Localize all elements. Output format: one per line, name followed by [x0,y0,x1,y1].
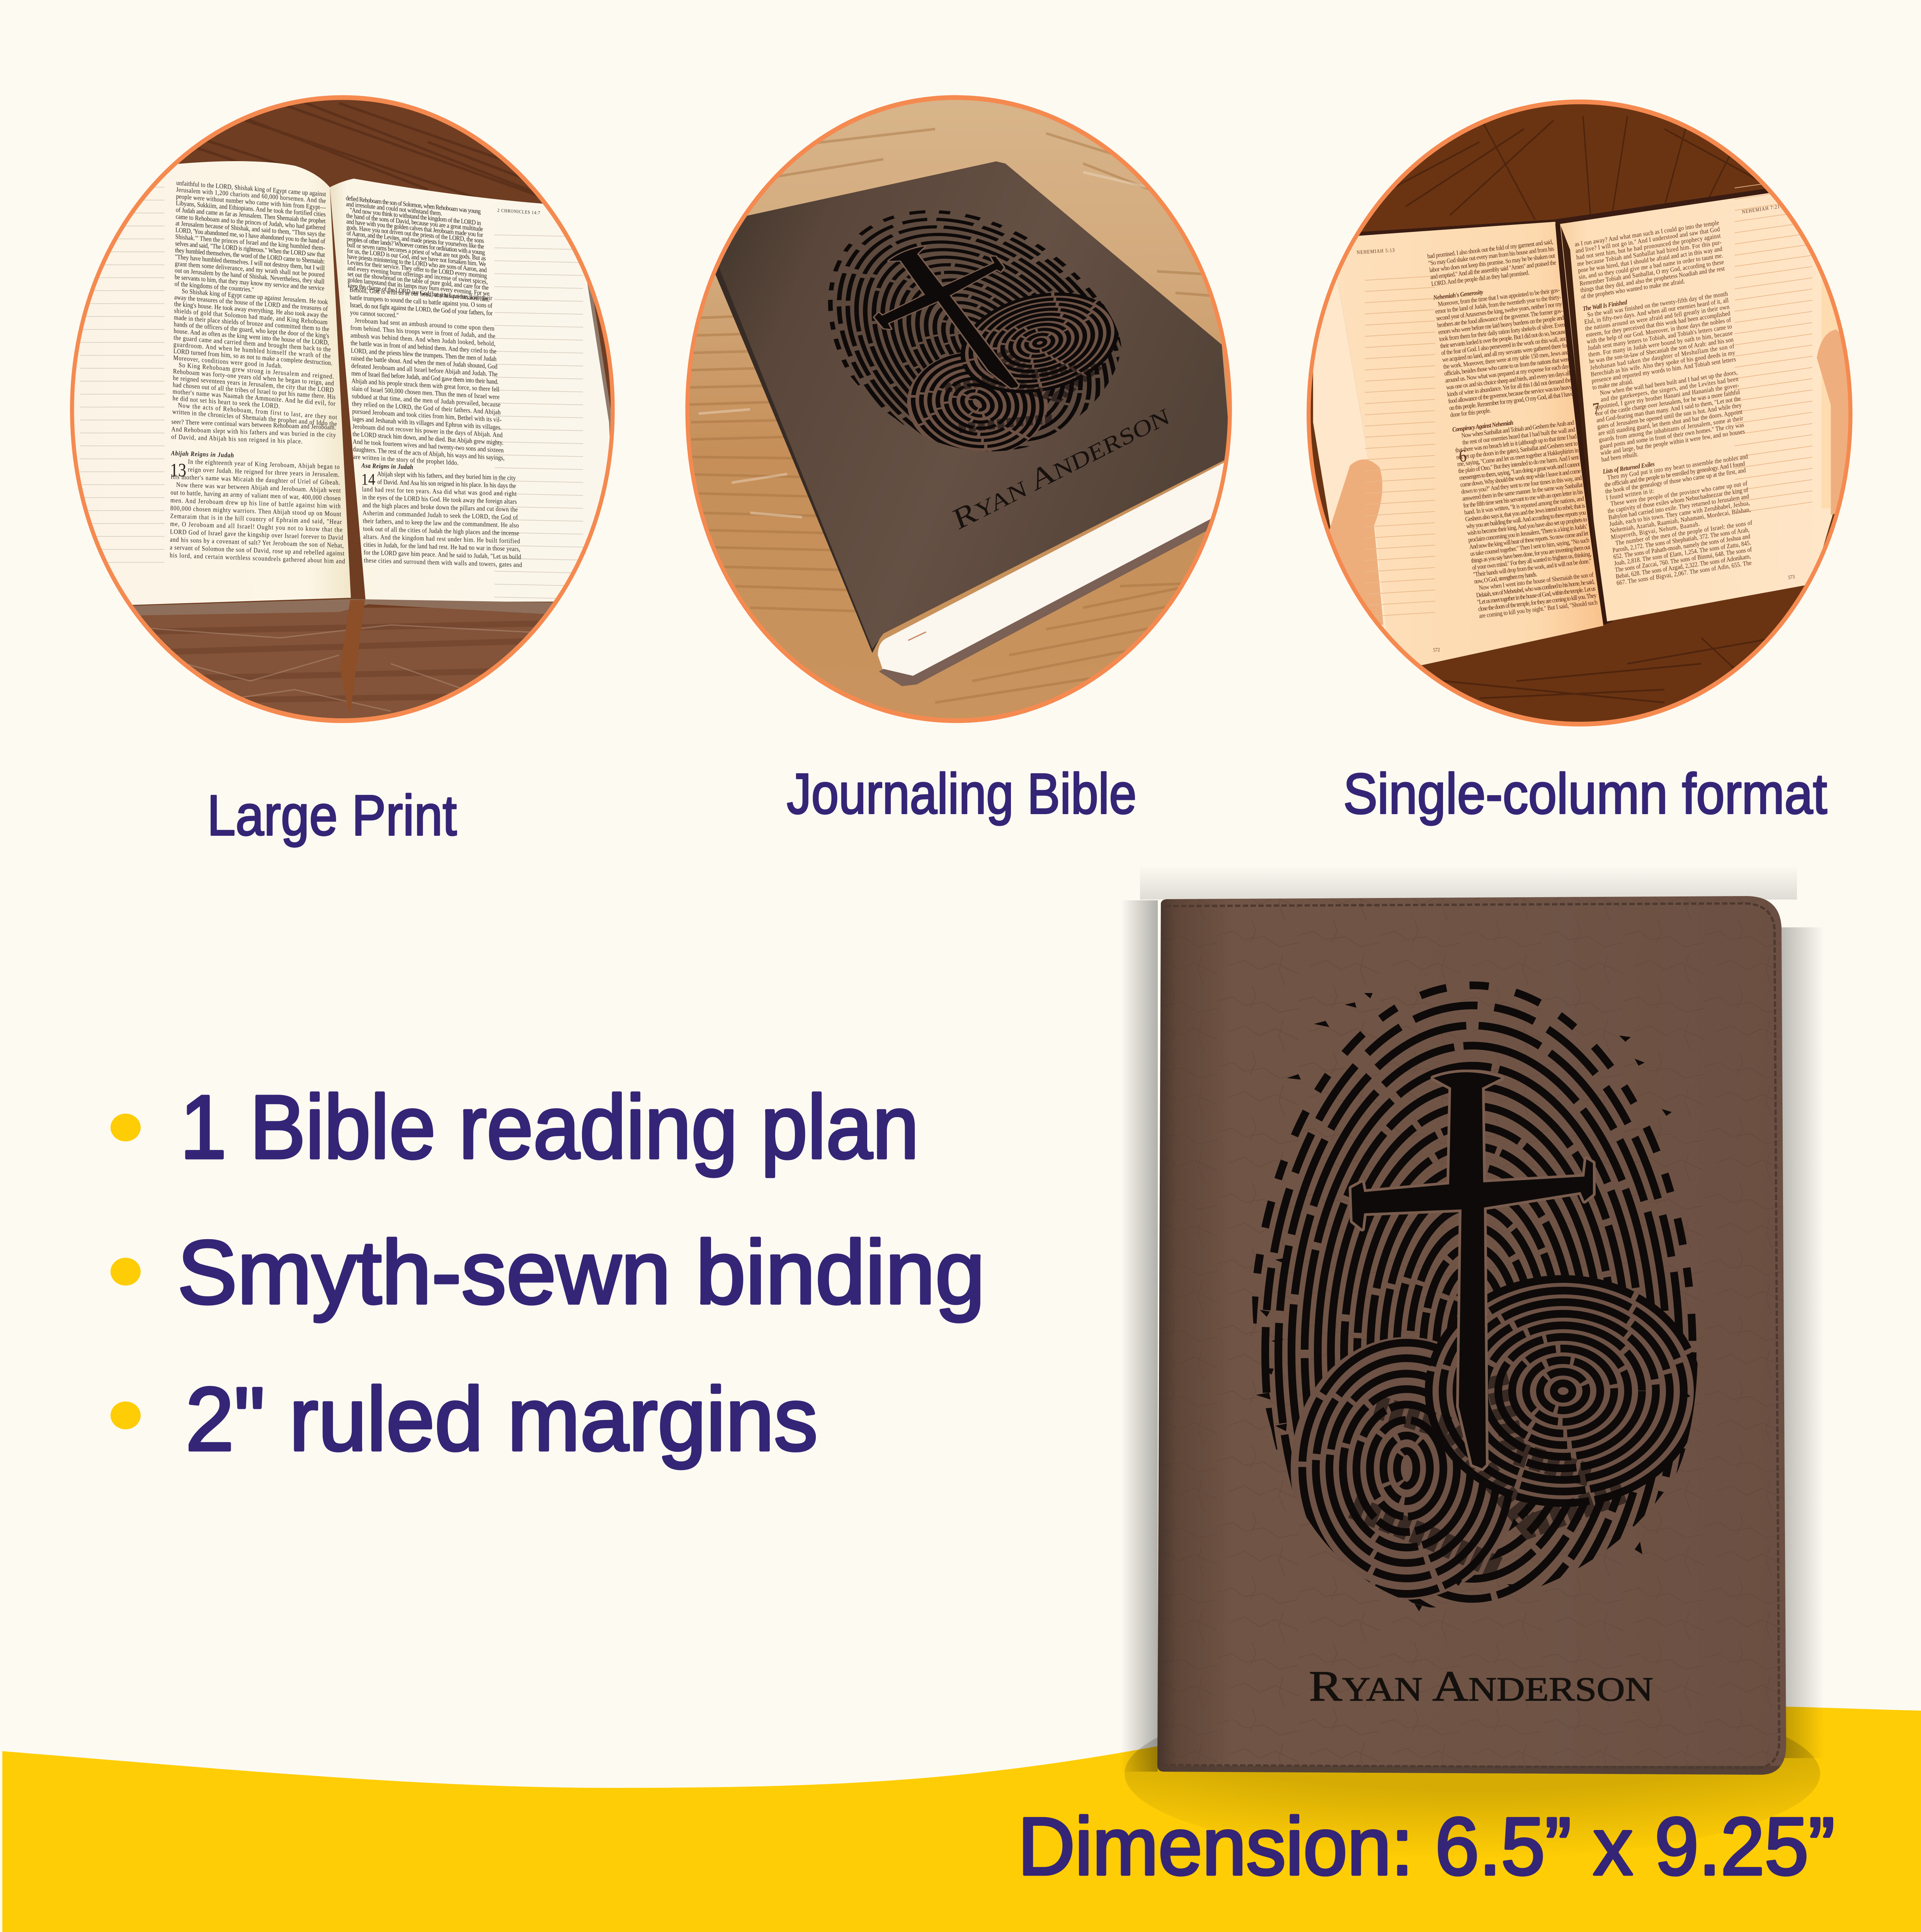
scripture text: right column: the nations around us were afraid and fell greatly in their own [1585,303,1730,332]
scripture text: left column: Moreover, conditions were good in Judah. [173,354,282,370]
scripture text: right column: Nehemiah, Azariah, Raamiah, Nahamani, Mordecai, Bilshan, [1610,506,1751,534]
scripture text: left column: they humbled themselves, the word of the LORD came to Shemaiah: [175,247,325,265]
scripture text: right column: These were the people of the province who came up out of [1610,480,1748,508]
scripture text: left column: was one ox and six choice sheep and birds, and every ten days all [1446,370,1571,391]
scripture text: right column: as I run away? And what man such as I could go into the temple [1574,219,1719,248]
bullet two [111,1258,141,1286]
scripture text: left column: And Rehoboam slept with his fathers and was buried in the city [171,426,336,439]
scripture text: left column: house. And as often as the king went into the house of the LORD, [174,328,329,346]
scripture text: left column: of David, and Abijah his son reigned in his place. [171,434,303,445]
scripture text: left column: from behind. Thus his troops were in front of Judah, and the [350,325,495,340]
scripture text: left column: his lord, and certain worthless scoundrels gathered about him and [170,552,345,565]
scripture text: right column: and irresolute and could not withstand them. [346,201,442,217]
scripture text: left column: reign over Judah. He reigned for three years in Jerusalem. [188,466,340,478]
scripture text: left column: he did not set his heart to seek the LORD. [172,395,280,410]
scripture text: right column: peoples of other lands? Whoever comes for ordination with a young [347,236,485,256]
scripture text: left column: LORD. And the people did as they had promised. [1431,269,1530,287]
scripture text: right column: he was the son-in-law of Shecaniah the son of Arah: and his son [1589,336,1734,365]
scripture text: left column: the LORD struck him down, and he died. But Abijah grew mighty. [352,431,504,447]
scripture text: left column: the battle was in front of and behind them. And they cried to the [351,340,497,355]
scripture text: left column: pursued Jeroboam and took cities from him, Bethel with its vil- [352,408,502,423]
scripture text: left column: they relied on the LORD, the God of their fathers. And Abijah [352,400,501,416]
scripture text: left column: of David. And Asa his son reigned in his place. In his days the [377,478,516,490]
scripture text: left column: daughters. The rest of the acts of Abijah, his ways and his sayings, [353,446,505,462]
scripture text: right column: wide and large, but the people within it were few, and no houses [1600,428,1745,457]
scripture text: left column: why you are building the wall. And according to these reports you [1466,509,1587,530]
scripture text: left column: us take counsel together." Then I sent to him, saying, "No such [1470,537,1590,558]
scripture text: right column: gods. Have you not driven out the priests of the LORD, the sons [346,224,484,245]
scripture text: right column: them. For many in Judah were bound by oath to him, because [1588,330,1733,359]
scripture text: right column: had been rebuilt. [1601,451,1639,463]
scripture text: right column: and live? I will not go in." And I understood and saw that God [1575,226,1720,255]
scripture text: left column: the plain of Ono." But they intended to do me harm. And I sent [1458,454,1579,475]
scripture text: right column: keep the charge of the LORD our God, but you have forsaken him. [347,282,490,303]
fingerprint and nail cross [1252,985,1698,1719]
book page block [878,459,1231,676]
photo: journaling bible cover on wood [676,77,1256,753]
scripture text: left column: Israel, do not fight against the LORD, the God of your fathers, for [350,302,493,317]
caption: large print: Large Print [207,784,457,847]
scripture text: right column: gates of Jerusalem be opened until the sun is hot. And while they [1597,402,1742,430]
scripture text: left column: 14 [361,470,375,488]
scripture text: left column: raised the battle shout. And when the men of Judah shouted, God [351,355,497,370]
scripture text: right column: guards from among the inhabitants of Jerusalem, some at their [1598,415,1744,444]
scripture text: right column: had not sent him, but he had pronounced the prophecy against [1576,232,1721,261]
scripture text: left column: 2 CHRONICLES 14:7 [497,208,541,216]
scripture text: left column: seer? There were continual wars between Rehoboam and Jeroboam. [171,418,336,431]
left hand [1328,459,1383,625]
scripture text: right column: appointed, I gave my brother Hanani and Hananiah the gover- [1594,382,1739,411]
scripture text: right column: sin, and so they could give me a bad name in order to taunt me. [1578,252,1724,281]
scripture text: left column: "So may God shake out every man from his house and from his [1428,245,1555,267]
scripture text: left column: close the doors of the temple, for they are coming to kill you. They [1478,592,1597,613]
scripture text: right column: bull or seven rams becomes a priest of what are not gods. But as [347,242,486,262]
scripture text: left column: And now the king will hear of these reports. So now come and let [1469,530,1589,551]
scripture text: left column: Now when I went into the house of Shemaiah the son of [1479,571,1594,592]
scripture text: left column: "Their hands will drop from the work, and it will not be done." [1473,558,1592,578]
scripture text: left column: written in the chronicles of Shemaiah the prophet and of Iddo the [172,408,337,428]
scripture text: left column: and the high places and broke down the pillars and cut down the [362,502,518,513]
yellow wave band [2,1706,1921,1932]
scripture text: right column: for us, the LORD is our God, and we have not forsaken him. We [347,247,486,268]
scripture text: left column: are written in the story of the prophet Iddo. [353,453,459,467]
scripture text: left column: 572 [1433,647,1440,653]
scripture text: left column: and his sons by a covenant of salt? Yet Jeroboam the son of Nebat, [170,536,344,549]
scripture text: left column: altars. And the kingdom had rest under him. He built fortified [363,533,520,545]
scripture text: left column: are coming to kill you by night." But I said, "Should such [1479,599,1598,620]
scripture text: right column: guard posts and some in front of their own homes." The city was [1599,421,1744,450]
scripture text: left column: out on Jerusalem by the hand of Shishak. Nevertheless, they shall [175,267,325,286]
scripture text: left column: mother's name was Naamah the Ammonite. And he did evil, for [173,388,336,408]
scripture text: right column: presence and reported my words to him. And Tobiah sent letters [1591,356,1736,384]
book spine [713,218,883,653]
scripture text: left column: now, O God, strengthen my hands. [1474,571,1538,585]
scripture text: left column: kinds of wine in abundance. Yet for all this I did not demand the [1447,377,1572,398]
gutter shadow [1555,224,1613,625]
photo ring: large print [72,97,613,721]
scripture text: left column: and emptied." And all the assembly said "Amen" and praised the [1430,259,1557,281]
book lower cover [879,518,1216,686]
scripture text: left column: on this people. Remember for my good, O my God, all that I have [1449,390,1574,412]
scripture text: left column: people were without number who came with him from Egypt— [176,193,326,211]
scripture text: left column: the work. Moreover, there were at my table 150 men, Jews and [1443,349,1570,371]
scripture text: right column: 667. The sons of Bigvai, 2,067. The sons of Adin, 655. The [1616,560,1752,587]
scripture text: left column: proclaim concerning you in Jerusalem, 'There is a king in Judah.' [1468,523,1588,544]
scripture text: left column: Asherim and commanded Judah to seek the LORD, the God of [362,510,518,521]
scripture text: left column: So King Rehoboam grew strong in Jerusalem and reigned. [179,362,334,380]
scripture text: right column: the officials and the people to be enrolled by genealogy. And I found [1604,460,1746,488]
scripture text: left column: not set up the doors in the gates), Sanballat and Geshem sent to [1456,440,1578,461]
scripture text: right column: with the help of our God. Moreover, in those days the nobles of [1586,316,1732,345]
scripture text: left column: down to you?" And they sent to me four times in this way, and [1461,474,1582,495]
scripture text: left column: LORD, and the priests blew the trumpets. Then the men of Judah [351,347,497,363]
right page [1560,192,1834,621]
scripture text: left column: Behold, God is with us at our head, and his priests with their [349,286,493,302]
scripture text: left column: wish to become their king. And you have also set up prophets to [1467,516,1588,537]
bullet three [111,1401,141,1429]
scripture text: left column: ambush was behind them. And when Judah looked, behold, [351,332,495,347]
scripture text: left column: 800,000 chosen mighty warriors. Then Abijah stood up on Mount [170,505,341,518]
scripture text: left column: brothers ate the food allowance of the governor. The former gov- [1437,308,1564,329]
scripture text: left column: guardroom. And when he humbled himself the wrath of the [174,341,331,360]
scripture text: left column: these cities and surround them with walls and towers, gates and [364,557,522,569]
book cover product image [1121,866,1824,1859]
scripture text: right column: set out the showbread on the table of pure gold, and care for the [347,270,489,291]
scripture text: right column: Bebai, 628. The sons of Azgad, 2,322. The sons of Adonikam, [1615,553,1751,580]
scripture text: left column: a servant of Solomon the son of David, rose up and rebelled against [170,544,345,557]
scripture text: left column: of your own mind." For they all wanted to frighten us, thinking, [1472,551,1592,571]
scripture text: left column: in the eyes of the LORD his God. He took away the foreign altars [362,494,517,505]
scripture text: left column: labor who does not keep this promise. So may he be shaken out [1429,252,1556,274]
book cover strip [128,599,561,616]
scripture text: right column: golden lampstand that its lamps may burn every evening. For we [347,276,490,298]
scripture text: left column: LORD, 'You abandoned me, so I have abandoned you to the hand of [175,226,325,245]
scripture text: left column: battle trumpets to sound the call to battle against you. O sons of [350,294,493,310]
scripture text: left column: of Judah and came as far as Jerusalem. Then Shemaiah the prophet [176,206,326,225]
scripture text: left column: Nehemiah's Generosity [1433,289,1484,301]
feature list [111,1077,985,1469]
scripture text: left column: subdued at that time, and the men of Judah prevailed, because [352,393,500,408]
scripture text: left column: had chosen out of all the tribes of Israel to put his name there. His [173,381,335,401]
scripture text: left column: Zemaraim that is in the hill country of Ephraim and said, "Hear [170,513,342,526]
scripture text: right column: Joab, 2,818. The sons of Elam, 1,254. The sons of Zattu, 845. [1614,539,1751,567]
scripture text: left column: Abijah and his people struck them with great force, so there fell [351,378,500,393]
scripture text: left column: land had rest for ten years. Asa did what was good and right [362,486,517,498]
scripture text: left column: Geshem also says it, that you and the Jews intend to rebel; that is [1465,502,1586,523]
scripture text: left column: hands of the officers of the guard, who kept the door of the king's [174,321,329,340]
scripture text: left column: be servants to him, that they may know my service and the service [175,274,325,292]
scripture text: right column: pose he was hired, that I should be afraid and act in this way and [1577,245,1723,274]
scripture text: left column: Shishak.'" Then the princes of Israel and the king humbled them- [175,233,325,252]
leather cover [1157,896,1786,1775]
scripture text: left column: the guard came and carried them and brought them back to the [174,334,331,353]
scripture text: left column: messengers to them, saying, "I am doing a great work and I cannot [1459,461,1581,482]
scripture text: left column: we acquired no land, and all my servants were gathered there for [1442,342,1569,364]
scripture text: left column: LORD God of Israel gave the kingship over Israel forever to David [170,528,343,541]
caption: journaling bible: Journaling Bible [787,762,1137,826]
scripture text: right column: to make me afraid. [1592,378,1633,391]
scripture text: left column: defeated Jeroboam and all Israel before Abijah and Judah. The [351,362,498,378]
scripture text: left column: "Let us meet together in the house of God, within the temple. Let us [1477,585,1596,606]
scripture text: right column: and God-fearing man than many. And I said to them, "Let not the [1596,395,1741,424]
scripture text: left column: Rehoboam was forty-one years old when he began to reign, and [173,368,334,387]
scripture text: right column: and the gatekeepers, the singers, and the Levites had been [1600,376,1739,403]
scripture text: right column: the hand of the sons of David, because you are a great multitude [346,212,483,233]
scripture text: left column: at Jerusalem because of Shishak, and said to them, "Thus says the [175,220,325,238]
scripture text: left column: Abijah Reigns in Judah [171,450,234,459]
scripture text: left column: Now when Sanballat and Tobiah and Geshem the Arab and [1461,419,1575,439]
scripture text: left column: their fathers, and to keep the law and the commandment. He also [363,517,519,529]
scripture text: left column: me, saying, "Come and let us meet together at Hakkephirim in [1457,447,1579,468]
scripture text: right column: of Aaron, and the Levites, and made priests for yourselves like the [347,230,484,250]
scripture text: left column: come down. Why should the work stop while I leave it and come [1460,468,1581,488]
photo: large print open bible [70,95,615,723]
scripture text: left column: LORD turned from him, so as not to make a complete destruction. [173,348,332,367]
scripture text: left column: took out of all the cities of Judah the high places and the incense [363,526,519,537]
scripture text: left column: "They have humbled themselves. I will not destroy them, but I will [175,253,325,272]
scripture text: right column: The number of the men of the people of Israel: the sons of [1615,519,1753,547]
scripture text: left column: Jerusalem with 1,200 chariots and 60,000 horsemen. And the [176,186,326,205]
specks around the fingerprint [1256,993,1690,1611]
scripture text: left column: ernor in the land of Judah, from the twentieth year to the thirty- [1435,294,1562,315]
scripture text: left column [169,180,541,569]
scripture text: left column: second year of Artaxerxes the king, twelve years, neither I nor my [1436,301,1562,322]
scripture text: left column: unfaithful to the LORD, Shishak king of Egypt came up against [176,180,326,198]
scripture text: left column: that there was no breach left in it (although up to that time I had [1455,433,1577,454]
scripture text: left column: Delaiah, son of Mehetabel, who was confined to his home, he said, [1476,578,1595,599]
dimension label: Dimension: 6.5” x 9.25” [1018,1801,1835,1892]
scripture text: right column: defied Rehoboam the son of Solomon, when Rehoboam was young [346,195,481,215]
scripture text: right column: Lists of Returned Exiles [1602,461,1655,475]
scripture text: left column: made in their place shields of bronze and committed them to the [174,314,329,333]
scripture text: right column: are still standing guard, let them shut and bar the doors. Appoint [1598,408,1743,437]
scripture text: left column: grant them some deliverance, and my wrath shall not be poured [175,260,325,279]
scripture text: right column: Now when the wall had been built and I had set up the doors, [1599,369,1738,397]
scripture text: left column: lages and Jeshanah with its villages and Ephron with its villages. [352,415,502,431]
scripture text: right column: Parosh, 2,172. The sons of Shephatiah, 372. The sons of Arah, [1612,526,1750,554]
scripture text: left column: Now the acts of Rehoboam, from first to last, are they not [178,402,337,421]
scripture text: right column: Berechiah as his wife. Also they spoke of his good deeds in my [1590,349,1736,378]
ribbon marker [340,600,365,716]
scripture text: right column: Jehohanan had taken the daughter of Meshullam the son of [1589,343,1735,372]
scripture text: left column: out to battle, having an army of valiant men of war, 400,000 chosen [170,489,341,502]
scripture text: left column: done for this people. [1450,407,1491,419]
name on cover: RYAN ANDERSON [1309,1662,1653,1710]
scripture text: right column: Levites for their service. They offer to the LORD every morning [347,259,487,280]
scripture text: right column: 652. The sons of Pahath-moab, namely the sons of Jeshua and [1613,533,1751,561]
feature: reading plan: 1 Bible reading plan [180,1077,919,1177]
scripture text: right column: and have with you the golden calves that Jeroboam made you for [346,218,483,239]
photo ring: journaling bible [687,97,1230,721]
scripture text: left column: the rest of our enemies heard that I had built the wall and [1462,426,1576,446]
scripture text: left column: Libyans, Sukkiim, and Ethiopians. And he took the fortified cities [176,200,326,218]
scripture text: left column: for the LORD gave him peace. And he said to Judah, "Let us build [364,549,521,561]
fingerprint cross emblem [769,172,1198,525]
scripture text: right column: Then my God put it into my heart to assemble the nobles and [1607,453,1748,481]
scripture text: left column: took from them for their daily ration forty shekels of silver. Even [1439,321,1565,343]
scripture text: left column: 6 [1458,446,1467,466]
scripture text: right column: Elul, in fifty-two days. And when all our enemies heard of it, all [1584,297,1729,326]
scripture text: left column: of the fear of God. I also persevered in the work on this wall, and [1441,335,1567,357]
bullet one [111,1114,141,1141]
scripture text: left column: had promised. I also shook out the fold of my garment and said, [1427,238,1553,260]
feature: margins: 2" ruled margins [185,1369,818,1469]
scripture text: left column: selves and said, "The LORD is righteous." When the LORD saw that [175,240,325,259]
scripture text: left column: around us. Now what was prepared at my expense for each day [1445,363,1570,384]
right hand [1817,330,1853,515]
scripture text: left column: In the eighteenth year of King Jeroboam, Abijah began to [188,458,340,471]
scripture text: right column: So the wall was finished on the twenty-fifth day of the month [1587,290,1728,318]
scripture text: left column: of the kingdoms of the countries." [174,281,254,294]
scripture text: left column: hand. In it was written, "It is reported among the nations, and [1464,495,1585,516]
scripture text: left column: he reigned seventeen years in Jerusalem, the city that the LORD [173,374,334,394]
scripture text: left column: came to Rehoboam and to the princes of Judah, who had gathered [175,213,325,231]
scripture text: left column: cities in Judah, for the land had rest. He had no war in those years, [363,541,520,553]
scripture text: left column: for the fifth time sent his servant to me with an open letter in his [1463,488,1584,509]
scripture text: left column: 7 [1592,399,1601,418]
scripture text: right column: things that they did, and also the prophetess Noadiah and the rest [1580,265,1725,294]
scripture text: right column: Babylon had carried into exile. They returned to Jerusalem and [1608,493,1749,521]
scripture text: left column: Abijah slept with his fathers, and they buried him in the city [377,471,516,482]
scripture text: left column: me, O Jeroboam and all Israel! Ought you not to know that the [170,520,342,534]
scripture text: left column: things as you say have been done, for you are inventing them out [1471,544,1591,565]
scripture text: right column: the book of the genealogy of those who came up at the first, and [1605,467,1746,495]
open book right page [330,179,613,602]
scripture text: left column: shields of gold that Solomon had made, and King Rehoboam [174,307,328,326]
scripture text: left column: away the treasures of the house of the LORD and the treasures of [174,294,328,313]
scripture text: left column: His mother's name was Micaiah the daughter of Uriel of Gibeah. [171,473,340,486]
scripture text: left column: men of Israel fled before Judah, and God gave them into their hand. [351,370,499,386]
book cover [719,162,1231,649]
scripture text: right column: I found written in it: [1606,487,1655,502]
scripture text: right column: me because Tobiah and Sanballat had hired him. For this pur- [1577,239,1722,268]
scripture text: left column: ernors who were before me laid heavy burdens on the people and [1438,314,1565,336]
scripture text: right column: The Wall Is Finished [1582,299,1628,313]
open book left page [58,161,351,605]
scripture text: right column: and every evening burnt offerings and incense of sweet spices, [347,265,488,286]
scripture text: left column: you cannot succeed." [350,309,399,319]
book page edges left [1313,271,1389,642]
scripture text: left column: Jeroboam had sent an ambush around to come upon them [354,317,495,332]
scripture text: left column: Now there was war between Abijah and Jeroboam. Abijah went [176,481,341,494]
left page [1336,222,1603,666]
scripture text: left column: And he took fourteen wives and had twenty-two sons and sixteen [353,438,504,454]
scripture text: right column: the captivity of those exiles whom Nebuchadnezzar the king of [1607,486,1749,515]
scripture text: left column: their servants lorded it over the people. But I did not do so, because [1440,328,1567,350]
scripture text: right column: Judah sent many letters to Tobiah, and Tobiah's letters came to [1587,323,1732,352]
scripture text: right column: Remember Tobiah and Sanballat, O my God, according to these [1579,259,1724,287]
photo: single column open bible held by hands [1295,77,1875,753]
scripture text: left column: food allowance of the governor, because the service was too heavy [1448,383,1573,405]
scripture text: left column: 573 [1788,574,1795,580]
photo ring: single column [1308,102,1850,724]
scripture text: right column: of the prophets who wanted to make me afraid. [1581,278,1685,301]
scripture text: left column: NEHEMIAH 7:21 [1742,204,1780,215]
name embossed: RYAN ANDERSON [949,397,1173,536]
scripture text: right column: "And now you think to withstand the kingdom of the LORD in [350,207,481,227]
scripture text: left column: the king's house. He took away everything. He also took away the [174,301,328,319]
scripture text: right column: The sons of Zaccai, 760. The sons of Binnui, 648. The sons of [1615,546,1753,574]
scripture text: left column: men. And Jeroboam drew up his line of battle against him with [170,497,340,510]
scripture text: left column: slain of Israel 500,000 chosen men. Thus the men of Israel were [352,385,500,401]
scripture text: right column: esteem, for they perceived that this work had been accomplished [1586,310,1730,339]
feature: binding: Smyth-sewn binding [177,1222,985,1323]
scripture text: left column: answered them in the same manner. In the same way Sanballat [1462,481,1584,502]
scripture text: right column: nor of the castle charge over Jerusalem, for he was a more faithful [1595,389,1741,417]
scripture text: left column: 13 [170,459,186,480]
scripture text: right column: Judah, each to his town. They came with Zerubbabel, Jeshua, [1609,500,1750,528]
scripture text: left column: Jeroboam did not recover his power in the days of Abijah. And [352,423,503,439]
scripture text: right column: Mispereth, Bigvai, Nehum, Baanah. [1610,520,1700,541]
scripture text: left column: So Shishak king of Egypt came up against Jerusalem. He took [182,288,328,306]
scripture text: left column: Moreover, from the time that I was appointed to be their gov- [1438,287,1560,308]
scripture text: left column: officials, besides those who came to us from the nations that were [1444,355,1570,378]
scripture text: left column [1356,204,1795,653]
scripture text: left column: Asa Reigns in Judah [361,462,413,471]
scripture text: left column: NEHEMIAH 5:13 [1356,247,1395,255]
caption: single column format: Single-column format [1343,762,1827,826]
scripture text: right column: have priests ministering to the LORD who are sons of Aaron, and [347,253,487,274]
scripture text: left column: Conspiracy Against Nehemiah [1452,419,1514,434]
